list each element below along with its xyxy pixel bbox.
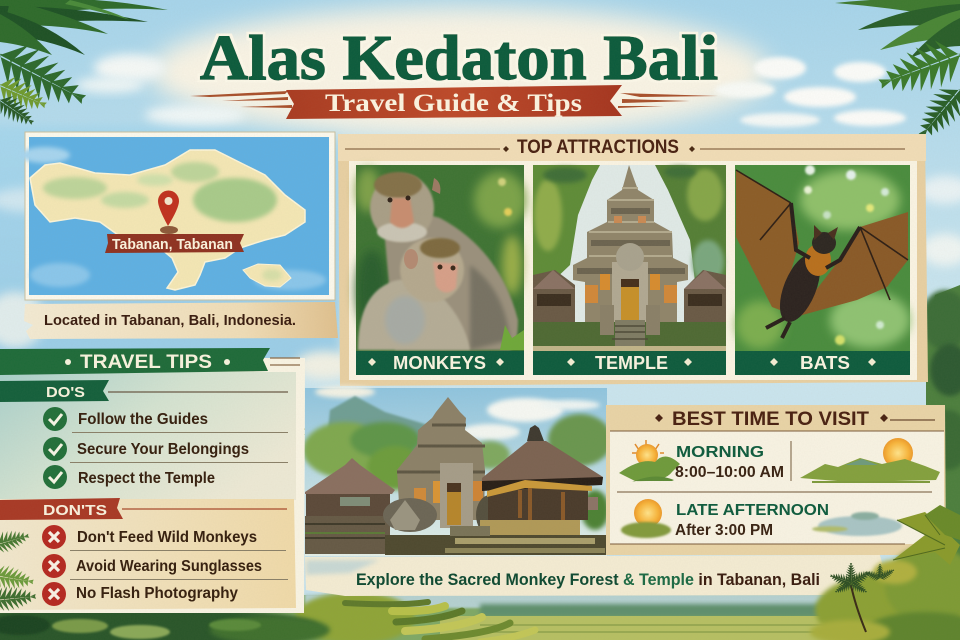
do item: follow the guides: Follow the Guides	[78, 411, 208, 428]
don'ts ribbon: DON'TS	[43, 502, 107, 519]
scene: trees	[303, 414, 612, 530]
do's ribbon	[0, 380, 288, 402]
map pin	[158, 190, 179, 234]
subtitle ribbon: Travel Guide & Tips	[325, 90, 582, 117]
do item: follow the guides	[43, 407, 208, 431]
heading ribbon: travel tips	[0, 348, 270, 375]
don't item: avoid sunglasses: Avoid Wearing Sunglasses	[76, 558, 262, 575]
rice terraces	[345, 602, 535, 640]
late afternoon row: After 3:00 PM	[675, 522, 773, 539]
don't item: no flash photography	[42, 582, 238, 606]
don't item: feed wild monkeys: Don't Feed Wild Monkeys	[77, 529, 257, 546]
label: monkeys	[356, 351, 524, 375]
location caption: Located in Tabanan, Bali, Indonesia.	[44, 312, 296, 329]
attraction: bats	[735, 165, 910, 351]
label: monkeys: MONKEYS	[393, 353, 486, 373]
panel: top attractions	[338, 134, 928, 386]
subtitle ribbon	[190, 85, 718, 119]
do item: secure your belongings: Secure Your Belongings	[77, 441, 249, 458]
late afternoon row	[621, 499, 902, 539]
attraction: temple	[533, 165, 726, 351]
heading: best time to visit	[655, 409, 935, 430]
caption banner	[305, 555, 890, 596]
label: temple: TEMPLE	[595, 353, 668, 373]
icon: afternoon sun	[621, 499, 671, 538]
heading: best time to visit: BEST TIME TO VISIT	[672, 409, 869, 430]
label: bats	[735, 351, 910, 375]
palm fronds top left	[0, 0, 168, 133]
scene: pavilion	[480, 425, 603, 535]
don't item: feed wild monkeys	[42, 525, 257, 549]
scene: temple gate	[383, 397, 504, 535]
label: bats: BATS	[800, 353, 850, 373]
map: Bali island	[30, 150, 305, 290]
late afternoon row: LATE AFTERNOON	[676, 502, 829, 519]
location caption	[24, 302, 338, 339]
do item: respect the temple	[43, 465, 215, 489]
icon: clouds landscape	[812, 512, 902, 536]
panel: best time to visit	[606, 405, 946, 555]
map label: Tabanan, Tabanan	[112, 236, 233, 253]
panel: travel tips	[0, 348, 305, 613]
heading ribbon: travel tips: TRAVEL TIPS	[80, 352, 212, 373]
don't item: avoid sunglasses	[42, 554, 262, 578]
title: Alas Kedaton Bali	[200, 22, 718, 93]
caption banner: Explore the Sacred Monkey Forest & Temple in Tabanan, Bali	[356, 570, 820, 589]
scene: steps and ground	[385, 526, 607, 555]
palm left mid	[300, 383, 356, 458]
scene: mountain	[325, 396, 430, 460]
attraction: monkeys	[356, 165, 526, 351]
morning row: 8:00–10:00 AM	[675, 464, 784, 481]
label: temple	[533, 351, 726, 375]
foliage over lower right corner	[810, 505, 960, 640]
do's ribbon: DO'S	[46, 384, 85, 401]
scene: left hut	[305, 458, 395, 554]
panel: map	[20, 132, 335, 300]
don'ts ribbon	[0, 498, 287, 520]
lower left palm	[0, 525, 37, 613]
jungle foliage right and bottom	[0, 285, 960, 640]
do item: respect the temple: Respect the Temple	[78, 470, 215, 487]
heading: top attractions: TOP ATTRACTIONS	[517, 137, 679, 158]
small palm trees	[828, 563, 896, 632]
morning row: MORNING	[676, 444, 764, 461]
icon: sunrise landscape	[800, 438, 940, 482]
morning row	[619, 438, 940, 482]
icon: morning sun over hills	[619, 440, 680, 482]
scene: temple illustration	[303, 386, 612, 556]
don't item: no flash photography: No Flash Photography	[76, 585, 238, 602]
palm fronds top right	[835, 0, 960, 148]
do item: secure your belongings	[43, 437, 249, 461]
